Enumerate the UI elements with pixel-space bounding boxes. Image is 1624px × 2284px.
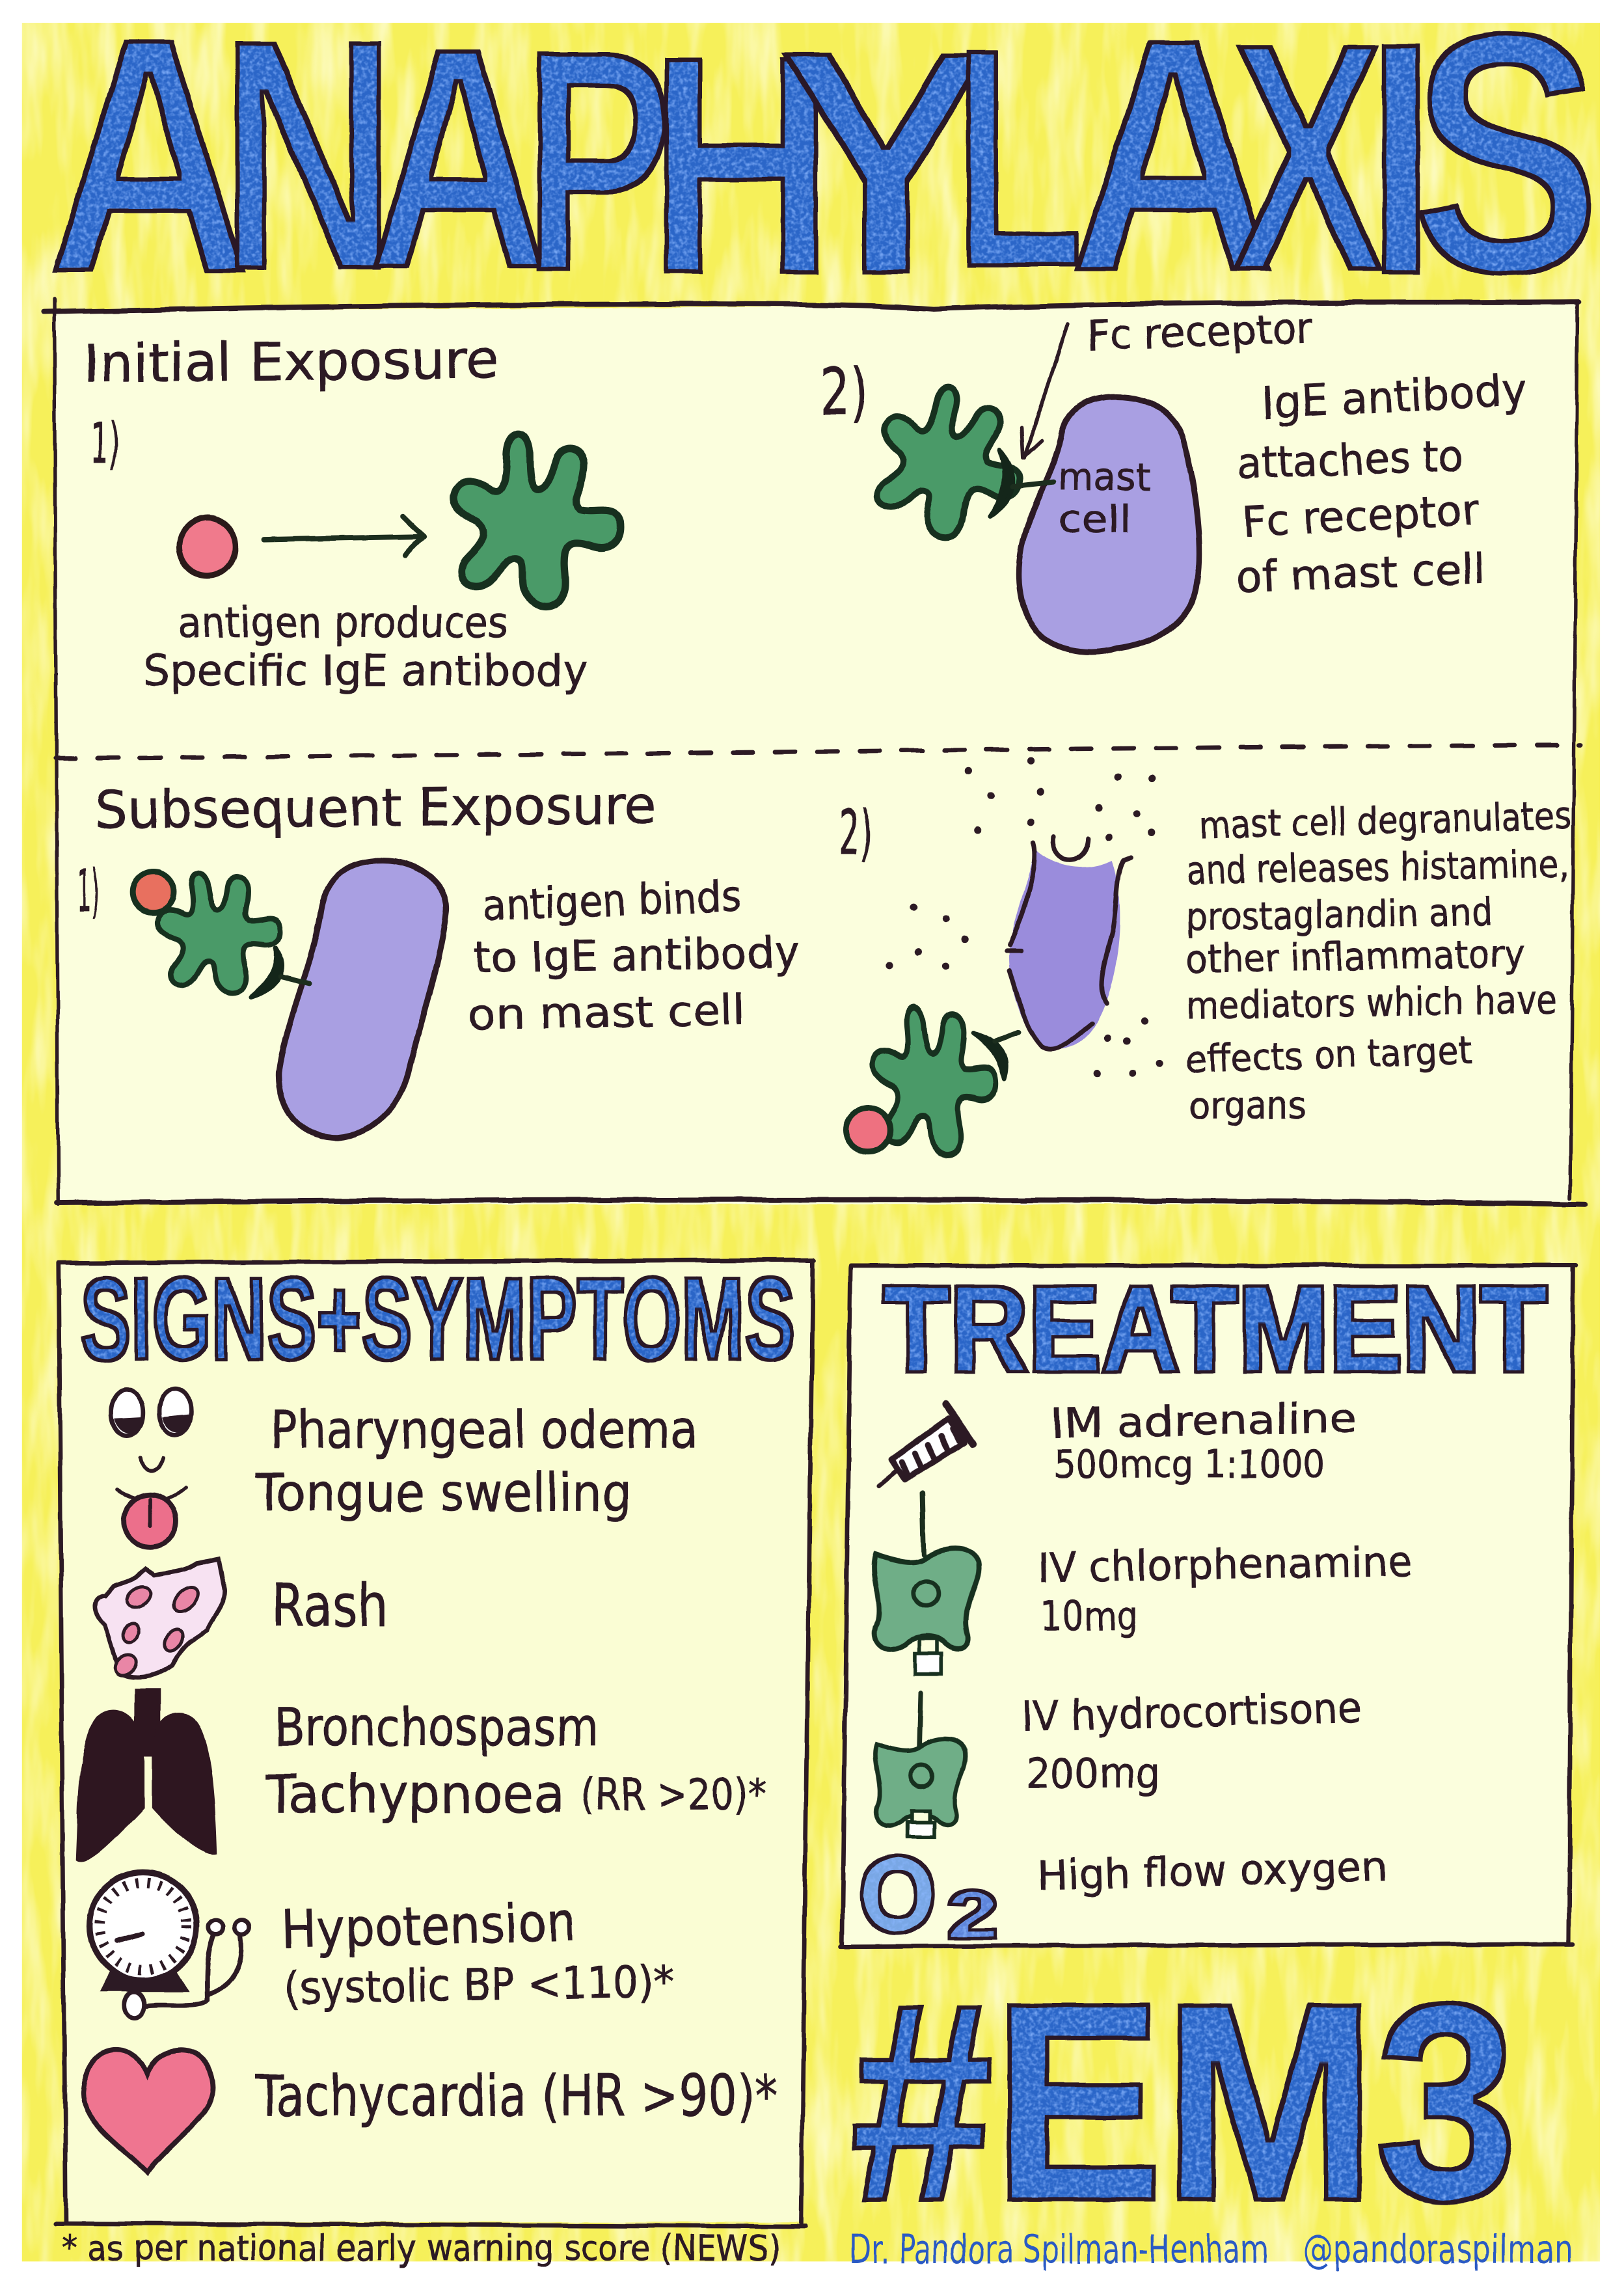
caption: IgE antibody attaches to Fc receptor: Fc receptor — [1241, 486, 1480, 547]
caption: IgE antibody attaches to Fc receptor: attaches to — [1236, 432, 1464, 489]
icon: receptor crescent — [973, 1032, 1006, 1079]
text: high flow oxygen: High flow oxygen — [1036, 1843, 1388, 1899]
caption: antigen binds to IgE antibody: on mast cell — [468, 986, 746, 1040]
text: IM adrenaline: IM adrenaline — [1050, 1394, 1357, 1447]
arrow: antigen to antibody — [264, 516, 425, 556]
icon: mast cell — [278, 860, 447, 1137]
icon: blood pressure gauge and stethoscope — [89, 1872, 250, 2018]
icon: O2 — [859, 1836, 998, 1953]
icon: O2: O — [859, 1836, 936, 1953]
icon: IV bag — [874, 1493, 979, 1674]
icon: antibody — [152, 862, 288, 1002]
credit: author and handle: Dr. Pandora Spilman-Henham — [849, 2227, 1268, 2273]
icon: antigen — [133, 872, 174, 913]
heading: treatment: TREATMENT — [883, 1262, 1547, 1396]
caption: antigen binds to IgE antibody — [468, 873, 800, 1040]
icon: receptor crescent — [251, 947, 282, 998]
caption: antigen binds to IgE antibody: to IgE antibody — [474, 929, 800, 983]
hashtag: #EM3: #EM3 — [851, 1946, 1518, 2259]
text: IM adrenaline: 500mcg 1:1000 — [1053, 1442, 1325, 1486]
icon: receptor stalk — [995, 1032, 1019, 1041]
icon: IgE antibody bound — [864, 375, 1036, 551]
caption: antigen produces specific IgE antibody — [143, 599, 588, 696]
text: IM adrenaline — [1050, 1394, 1357, 1486]
icon: rash — [95, 1558, 225, 1679]
title: ANAPHYLAXIS: H — [647, 0, 836, 342]
text: bronchospasm, tachypnoea: (RR >20)* — [581, 1769, 766, 1820]
panel: mechanism of anaphylaxis — [44, 299, 1585, 1204]
text: rash: Rash — [271, 1572, 388, 1640]
icon: released granules — [885, 757, 1164, 1077]
icon: antibody — [867, 999, 1003, 1163]
heading: signs + symptoms: SIGNS+SYMPTOMS — [80, 1254, 795, 1384]
text: IV hydrocortisone: 200mg — [1026, 1750, 1160, 1797]
text: bronchospasm, tachypnoea: Bronchospasm — [275, 1697, 599, 1758]
icon: Fc receptor crescent — [990, 450, 1013, 516]
panel: signs and symptoms — [55, 1260, 815, 2227]
text: IV chlorphenamine — [1037, 1538, 1413, 1640]
label: mast cell: mast — [1058, 455, 1150, 499]
text: IV chlorphenamine: 10mg — [1040, 1592, 1139, 1640]
icon: mast cell — [1019, 396, 1199, 653]
section: IgE attaches to mast cell — [820, 305, 1528, 653]
text: bronchospasm, tachypnoea — [265, 1697, 766, 1825]
label: mast cell: cell — [1058, 497, 1131, 541]
icon: lungs — [76, 1689, 217, 1862]
title: ANAPHYLAXIS — [45, 0, 1603, 346]
icon: heart — [83, 2050, 213, 2173]
list: treatment — [874, 1394, 1413, 1899]
heading: subsequent exposure: Subsequent Exposure — [94, 775, 657, 841]
caption: mast cell degranulates: other inflammatory — [1186, 932, 1525, 982]
caption: IgE antibody attaches to Fc receptor: IgE antibody — [1260, 364, 1528, 429]
heading: initial exposure: Initial Exposure — [83, 329, 499, 395]
icon: syringe — [878, 1404, 973, 1486]
caption: mast cell degranulates: prostaglandin and — [1186, 890, 1493, 940]
icon: antigen — [846, 1108, 890, 1152]
footnote: NEWS: * as per national early warning score (NEWS) — [61, 2227, 781, 2268]
step 2 label: 2) — [820, 355, 869, 429]
icon: O2: 2 — [947, 1877, 998, 1952]
text: IV hydrocortisone — [1021, 1684, 1362, 1797]
text: pharyngeal odema, tongue swelling — [255, 1400, 697, 1523]
caption: IgE antibody attaches to Fc receptor: of mast cell — [1235, 545, 1486, 603]
text: tachycardia: Tachycardia (HR >90)* — [255, 2063, 778, 2129]
text: IV chlorphenamine: IV chlorphenamine — [1037, 1538, 1413, 1592]
caption: antigen binds to IgE antibody: antigen binds — [481, 873, 742, 931]
section: mast cell degranulation — [839, 757, 1572, 1163]
caption: mast cell degranulates: effects on target — [1185, 1028, 1472, 1082]
text: pharyngeal odema, tongue swelling: Tongue swelling — [255, 1462, 632, 1523]
caption: mast cell degranulates — [1185, 793, 1572, 1128]
caption: antigen produces specific IgE antibody: Specific IgE antibody — [143, 647, 588, 696]
section: subsequent exposure binding: 1) — [77, 858, 100, 925]
icon: receptor stalk — [280, 977, 310, 984]
icon: face with swollen tongue — [111, 1388, 191, 1547]
text: hypotension: (systolic BP <110)* — [284, 1956, 674, 2014]
step 2 label: 2) — [839, 798, 873, 869]
section: initial exposure — [83, 329, 621, 696]
caption: mast cell degranulates: mediators which have — [1186, 977, 1557, 1028]
text: hypotension — [280, 1892, 674, 2014]
icon: degranulating mast cell — [1007, 837, 1131, 1050]
text: IV hydrocortisone: IV hydrocortisone — [1021, 1684, 1362, 1741]
step 1 label: 1) — [90, 411, 120, 476]
caption: mast cell degranulates: mast cell degranulates — [1198, 793, 1572, 847]
text: hypotension: Hypotension — [280, 1892, 576, 1961]
arrow: Fc receptor pointer — [1022, 323, 1068, 458]
icon: IgE antibody — [453, 435, 621, 607]
caption: IgE antibody attaches to Fc receptor — [1235, 364, 1528, 603]
label: mast cell — [1058, 455, 1150, 541]
icon: IV bag — [875, 1693, 966, 1837]
label: Fc receptor: Fc receptor — [1086, 305, 1314, 360]
text: pharyngeal odema, tongue swelling: Pharyngeal odema — [270, 1400, 697, 1461]
caption: antigen produces specific IgE antibody: antigen produces — [178, 599, 508, 647]
text: bronchospasm, tachypnoea: Tachypnoea — [265, 1764, 565, 1825]
icon: receptor stalk — [1013, 483, 1053, 487]
section: subsequent exposure binding — [77, 775, 800, 1137]
caption: mast cell degranulates: organs — [1189, 1083, 1306, 1128]
icon: antigen — [180, 517, 235, 576]
list: signs and symptoms — [76, 1388, 778, 2173]
panel: treatment — [841, 1266, 1576, 1946]
